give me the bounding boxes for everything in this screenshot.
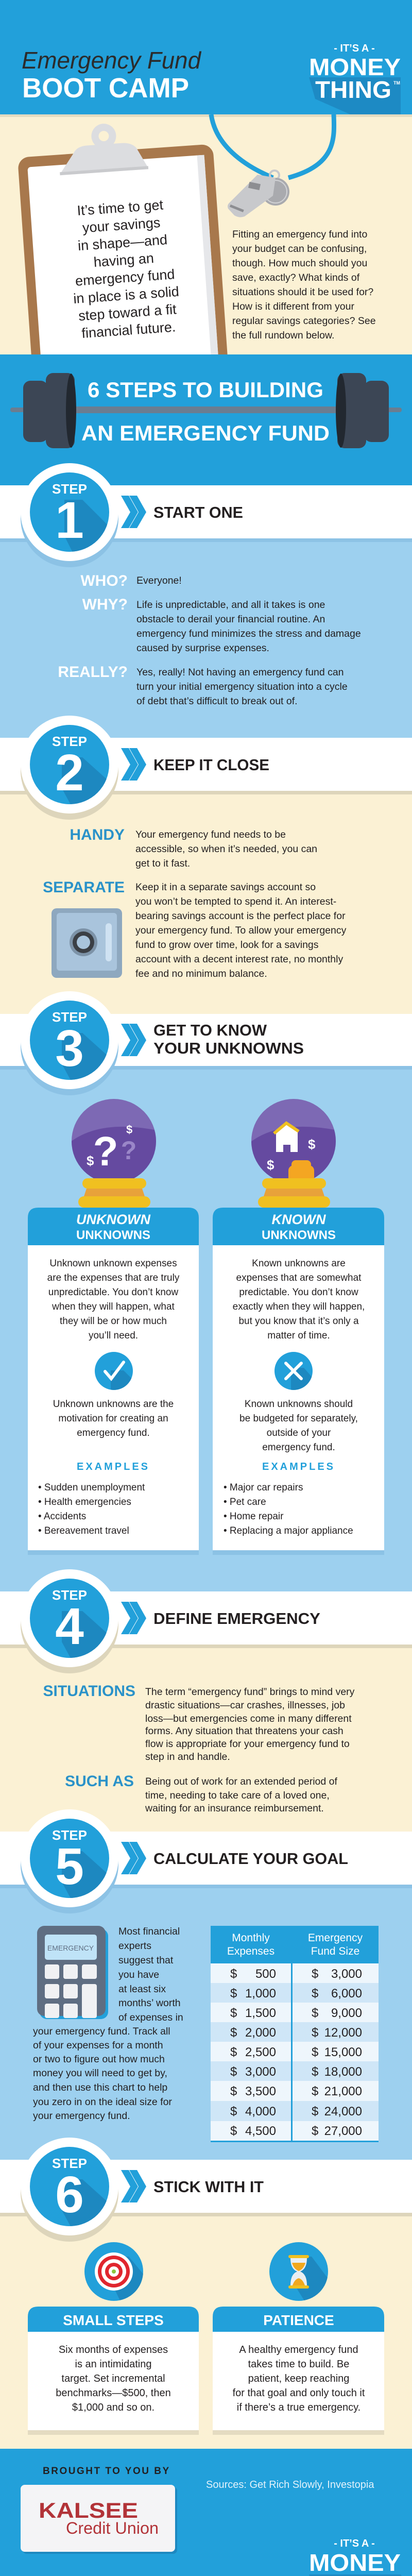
step 4 content: SUCH AS [65, 1773, 134, 1790]
step 4 header: 4 [55, 1598, 84, 1655]
clipboard text: emergency fund [75, 266, 175, 289]
table: emergency fund size: 12,000 [324, 2026, 362, 2040]
step 6 header: STICK WITH IT [153, 2178, 264, 2196]
card: small steps: target. Set incremental [61, 2373, 165, 2384]
card: small steps [28, 2307, 199, 2435]
step 5 text: of expenses in [118, 2012, 183, 2023]
step 1 content: caused by surprise expenses. [136, 642, 269, 654]
clipboard text: your savings [82, 215, 161, 235]
table: emergency fund size: $ [312, 2065, 318, 2079]
card: unknown unknowns: are the expenses that are truly [47, 1273, 180, 1283]
title: Emergency Fund [22, 47, 201, 74]
table: emergency fund size: 21,000 [324, 2084, 362, 2098]
logo: It's a Money Thing (footer): - IT’S A - [334, 2538, 375, 2549]
card: patience [213, 2307, 384, 2435]
table: emergency fund size: $ [230, 1967, 237, 1981]
table: emergency fund size: $ [230, 2045, 237, 2059]
table: emergency fund size: 3,500 [245, 2084, 276, 2098]
clipboard [15, 116, 229, 384]
step 1 content: REALLY? [58, 664, 128, 681]
icon: crystal ball unknown: $ [126, 1123, 132, 1136]
card: patience: PATIENCE [263, 2312, 334, 2328]
table: emergency fund size: $ [312, 2105, 318, 2119]
card: unknown unknowns: • Accidents [38, 1511, 86, 1522]
table: emergency fund size: $ [312, 2026, 318, 2040]
step 1 content: emergency fund minimizes the stress and damage [136, 628, 361, 639]
logo: It's a Money Thing (header): MONEY [309, 54, 401, 80]
step 4 content: drastic situations—car crashes, illnesses, job [145, 1700, 345, 1711]
icon: crystal ball known: $ [308, 1137, 316, 1152]
card: known unknowns: • Pet care [224, 1497, 266, 1507]
card: unknown unknowns: • Bereavement travel [38, 1526, 129, 1536]
card: unknown unknowns: motivation for creating an [58, 1413, 168, 1424]
icon: hourglass [269, 2242, 328, 2301]
table: emergency fund size: 15,000 [324, 2045, 362, 2059]
icon: crystal ball unknown: ? [121, 1136, 136, 1165]
step 5 header: 5 [55, 1838, 84, 1895]
card: small steps: benchmarks—$500, then [56, 2387, 171, 2399]
intro paragraph: save, exactly? What kinds of [232, 272, 360, 283]
step 1 content: Yes, really! Not having an emergency fund can [136, 667, 344, 678]
step 5 header [0, 1809, 412, 1913]
table: emergency fund size: Expenses [227, 1945, 274, 1957]
footer: BROUGHT TO YOU BY [43, 2466, 170, 2477]
card: patience: for that goal and only touch it [233, 2387, 365, 2399]
step 5 text: at least six [118, 1984, 166, 1995]
card: small steps: $1,000 and so on. [72, 2402, 154, 2413]
lanyard and whistle [211, 114, 334, 217]
card: unknown unknowns: EXAMPLES [77, 1461, 150, 1472]
table: emergency fund size: $ [230, 2084, 237, 2098]
intro paragraph: the full rundown below. [232, 330, 334, 341]
table: emergency fund size: $ [230, 2105, 237, 2119]
step 5 header: STEP [52, 1827, 87, 1843]
title [22, 47, 201, 104]
logo: It's a Money Thing (header): - IT’S A - [334, 43, 375, 54]
card: known unknowns: predictable. You don’t know [239, 1287, 358, 1298]
step 5 text: Most financial [118, 1926, 180, 1937]
intro paragraph: regular savings categories? See [232, 315, 376, 327]
barbell banner [0, 354, 412, 485]
step 2 content: account with a decent interest rate, no monthly [135, 954, 343, 965]
step 1 content: Everyone! [136, 575, 182, 586]
header [0, 0, 412, 117]
card: unknown unknowns: unpredictable. You don’t know [48, 1287, 179, 1298]
step 1 content: turn your initial emergency situation into a cycle [136, 681, 348, 692]
step 5 text: of your expenses for a month [33, 2040, 163, 2051]
logo: It's a Money Thing (footer): MONEY [309, 2549, 401, 2576]
icon: calculator: EMERGENCY [47, 1944, 94, 1952]
step 1 content: of debt that’s difficult to break out of. [136, 696, 298, 707]
footer: Sources: Get Rich Slowly, Investopia [206, 2479, 374, 2490]
step 4 content: forms. Any situation that threatens your cash [145, 1725, 344, 1737]
clipboard text: in place is a solid [73, 284, 180, 307]
card: known unknowns [213, 1208, 384, 1555]
background: cream intro [0, 114, 412, 354]
step 3 header: GET TO KNOW [153, 1021, 267, 1039]
table: emergency fund size: $ [312, 1987, 318, 2001]
step 4 content: SITUATIONS [43, 1683, 135, 1700]
table: emergency fund size: $ [312, 2006, 318, 2020]
card: unknown unknowns [28, 1208, 199, 1555]
step 4 header: STEP [52, 1587, 87, 1603]
step 2 header: 2 [55, 744, 84, 802]
step 4 content: Being out of work for an extended period of [145, 1776, 337, 1787]
step 4 content: waiting for an insurance reimbursement. [145, 1803, 324, 1814]
intro paragraph: your budget can be confusing, [232, 243, 367, 255]
step 2 header: STEP [52, 734, 87, 749]
clipboard text [67, 196, 182, 342]
card: known unknowns: KNOWN [272, 1212, 326, 1227]
table: emergency fund size: $ [230, 1987, 237, 2001]
card: known unknowns: Known unknowns are [252, 1258, 346, 1269]
step 2 content: bearing savings account is the perfect place for [135, 910, 346, 922]
table: emergency fund size: 4,500 [245, 2124, 276, 2138]
section 6 background [0, 2213, 412, 2449]
card: unknown unknowns: you’ll need. [89, 1330, 138, 1341]
card: known unknowns: matter of time. [267, 1330, 330, 1341]
step 4 header: DEFINE EMERGENCY [153, 1609, 320, 1628]
table: emergency fund size: $ [230, 2026, 237, 2040]
section 1 background [0, 538, 412, 738]
step 2 content: fee and no minimum balance. [135, 968, 267, 979]
table: emergency fund size: 24,000 [324, 2105, 362, 2119]
step 1 content [58, 572, 361, 707]
card: unknown unknowns: • Sudden unemployment [38, 1482, 145, 1493]
icon: crystal ball unknown [67, 1099, 160, 1208]
clipboard text: step toward a fit [78, 301, 177, 324]
clipboard text: financial future. [81, 319, 176, 341]
clipboard text: having an [93, 250, 154, 270]
card: known unknowns: outside of your [267, 1428, 331, 1438]
section 2 background [0, 791, 412, 1014]
logo: Kalsee Credit Union [21, 2485, 177, 2554]
table: emergency fund size: $ [312, 2124, 318, 2138]
card: small steps: Six months of expenses [59, 2344, 168, 2355]
table: emergency fund size: 4,000 [245, 2105, 276, 2119]
step 6 header: STEP [52, 2156, 87, 2171]
intro paragraph: though. How much should you [232, 258, 367, 269]
step 1 header: START ONE [153, 503, 243, 521]
table: emergency fund size: Monthly [232, 1932, 270, 1944]
table: emergency fund size: $ [230, 2065, 237, 2079]
card: unknown unknowns: Unknown unknowns are the [53, 1399, 174, 1410]
card: small steps: is an intimidating [75, 2359, 151, 2370]
step 5 text: months’ worth [118, 1997, 181, 2009]
table: emergency fund size: 3,000 [245, 2065, 276, 2079]
step 3 header [0, 991, 412, 1095]
card: known unknowns: expenses that are somewhat [236, 1273, 362, 1283]
step 2 header: KEEP IT CLOSE [153, 756, 269, 774]
step 4 header [0, 1569, 412, 1673]
table: emergency fund size: 2,000 [245, 2026, 276, 2040]
step 4 content: The term “emergency fund” brings to mind very [145, 1686, 355, 1698]
step 2 content: your emergency fund. To allow your emergency [135, 925, 347, 936]
card: unknown unknowns: they will be or how much [60, 1316, 167, 1327]
step 3 header: 3 [55, 1020, 84, 1077]
step 2 content: accessible, so when it’s needed, you can [135, 843, 317, 855]
step 5 text: or two to figure out how much [33, 2054, 165, 2065]
step 5 text: money you will need to get by, [33, 2067, 167, 2079]
step 1 content: Life is unpredictable, and all it takes is one [136, 599, 325, 611]
step 2 content [43, 826, 347, 979]
icon: crystal ball unknown: ? [93, 1128, 118, 1174]
step 1 content: WHO? [80, 572, 128, 589]
card: unknown unknowns: • Health emergencies [38, 1497, 131, 1507]
clipboard text: in shape—and [77, 232, 168, 253]
section 5 background [0, 1885, 412, 2160]
banner heading: 6 STEPS TO BUILDING [88, 378, 323, 402]
card: unknown unknowns: when they will happen, what [52, 1301, 175, 1312]
step 4 content: time, needing to take care of a loved one, [145, 1790, 330, 1801]
step 2 content: Your emergency fund needs to be [135, 829, 286, 840]
table: emergency fund size: Emergency [308, 1932, 363, 1944]
card: known unknowns: • Replacing a major appliance [224, 1526, 353, 1536]
logo: Kalsee Credit Union: Credit Union [66, 2519, 159, 2537]
clipboard text: It’s time to get [77, 197, 164, 218]
step 6 header [0, 2138, 412, 2242]
table: emergency fund size: $ [312, 2045, 318, 2059]
table: emergency fund size: 2,500 [245, 2045, 276, 2059]
step 4 content: flow is appropriate for your emergency fund to [145, 1738, 350, 1750]
step 4 content: step in and handle. [145, 1751, 230, 1762]
table: emergency fund size: 1,000 [245, 1987, 276, 2001]
section 3 background [0, 1066, 412, 1591]
icon: calculator [37, 1926, 108, 2019]
card: unknown unknowns: emergency fund. [77, 1428, 150, 1438]
step 1 header: 1 [55, 492, 84, 549]
step 3 header: STEP [52, 1009, 87, 1025]
card: known unknowns: • Major car repairs [224, 1482, 303, 1493]
step 5 text: and then use this chart to help [33, 2082, 167, 2093]
logo: Kalsee Credit Union: KALSEE [39, 2498, 138, 2522]
logo: It's a Money Thing (footer) [309, 2538, 412, 2576]
table: emergency fund size: 500 [255, 1967, 276, 1981]
icon: crystal ball known: $ [267, 1157, 274, 1173]
intro paragraph: How is it different from your [232, 301, 354, 312]
step 4 content: loss—but emergencies come in many different [145, 1713, 352, 1724]
step 5 text: your emergency fund. [33, 2110, 130, 2122]
card: patience: if there’s a true emergency. [237, 2402, 360, 2413]
step 5 text: you zero in on the ideal size for [33, 2096, 172, 2108]
table: emergency fund size: 6,000 [331, 1987, 362, 2001]
intro paragraph: Fitting an emergency fund into [232, 229, 367, 240]
step 5 header: CALCULATE YOUR GOAL [153, 1850, 348, 1868]
step 5 text: experts [118, 1940, 151, 1952]
table: emergency fund size: 18,000 [324, 2065, 362, 2079]
card: unknown unknowns: UNKNOWN [76, 1212, 150, 1227]
intro paragraph [232, 229, 376, 341]
step 2 content: fund to grow over time, look for a savings [135, 939, 319, 951]
table: emergency fund size: $ [312, 1967, 318, 1981]
step 5 text: your emergency fund. Track all [33, 2026, 170, 2037]
intro paragraph: situations should it be used for? [232, 286, 373, 298]
table: emergency fund size [211, 1926, 379, 2142]
card: known unknowns: exactly when they will happen, [233, 1301, 365, 1312]
table: emergency fund size: 9,000 [331, 2006, 362, 2020]
step 5 text: you have [118, 1969, 159, 1980]
banner heading: AN EMERGENCY FUND [81, 421, 330, 445]
card: known unknowns: UNKNOWNS [262, 1228, 336, 1242]
card: known unknowns: but you know that it’s only a [238, 1316, 359, 1327]
logo: It's a Money Thing (header): THING [315, 76, 391, 103]
table: emergency fund size: 3,000 [331, 1967, 362, 1981]
banner heading [81, 378, 330, 445]
step 1 content: WHY? [82, 596, 128, 613]
table: emergency fund size: $ [230, 2124, 237, 2138]
icon: safe [52, 908, 122, 978]
step 2 content: SEPARATE [43, 879, 125, 896]
step 1 header [0, 463, 412, 567]
step 6 header: 6 [55, 2166, 84, 2224]
step 1 header: STEP [52, 481, 87, 497]
table: emergency fund size: $ [312, 2084, 318, 2098]
section 4 background [0, 1645, 412, 1832]
card: patience: patient, keep reaching [248, 2373, 349, 2384]
card: known unknowns: • Home repair [224, 1511, 284, 1522]
card: patience: A healthy emergency fund [239, 2344, 358, 2355]
card: known unknowns: emergency fund. [262, 1442, 335, 1453]
table: emergency fund size: 1,500 [245, 2006, 276, 2020]
card: known unknowns: EXAMPLES [262, 1461, 335, 1472]
card: known unknowns: Known unknowns should [245, 1399, 353, 1410]
card: patience: takes time to build. Be [248, 2359, 349, 2370]
table: emergency fund size: $ [230, 2006, 237, 2020]
table: emergency fund size: Fund Size [311, 1945, 359, 1957]
logo: It's a Money Thing (header) [309, 43, 401, 114]
step 2 header [0, 716, 412, 820]
step 3 header: YOUR UNKNOWNS [153, 1039, 304, 1057]
icon: crystal ball known [247, 1099, 340, 1208]
card: known unknowns: be budgeted for separately, [239, 1413, 358, 1424]
card: unknown unknowns: UNKNOWNS [76, 1228, 150, 1242]
icon: crystal ball unknown: $ [87, 1153, 94, 1168]
step 2 content: get to it fast. [135, 858, 190, 869]
step 5 text: suggest that [118, 1955, 174, 1966]
step 2 content: HANDY [70, 826, 125, 843]
step 5 text [33, 1926, 183, 2122]
card: small steps: SMALL STEPS [63, 2312, 164, 2328]
step 2 content: you won’t be tempted to spend it. An interest- [135, 896, 336, 907]
table: emergency fund size: 27,000 [324, 2124, 362, 2138]
card: unknown unknowns: Unknown unknown expenses [49, 1258, 177, 1269]
icon: target [84, 2242, 143, 2301]
title: BOOT CAMP [22, 73, 189, 104]
step 4 content [43, 1683, 355, 1814]
step 1 content: obstacle to derail your financial routine. An [136, 614, 325, 625]
step 2 content: Keep it in a separate savings account so [135, 882, 316, 893]
logo: It's a Money Thing (header): TM [393, 80, 400, 86]
footer [0, 2449, 412, 2576]
